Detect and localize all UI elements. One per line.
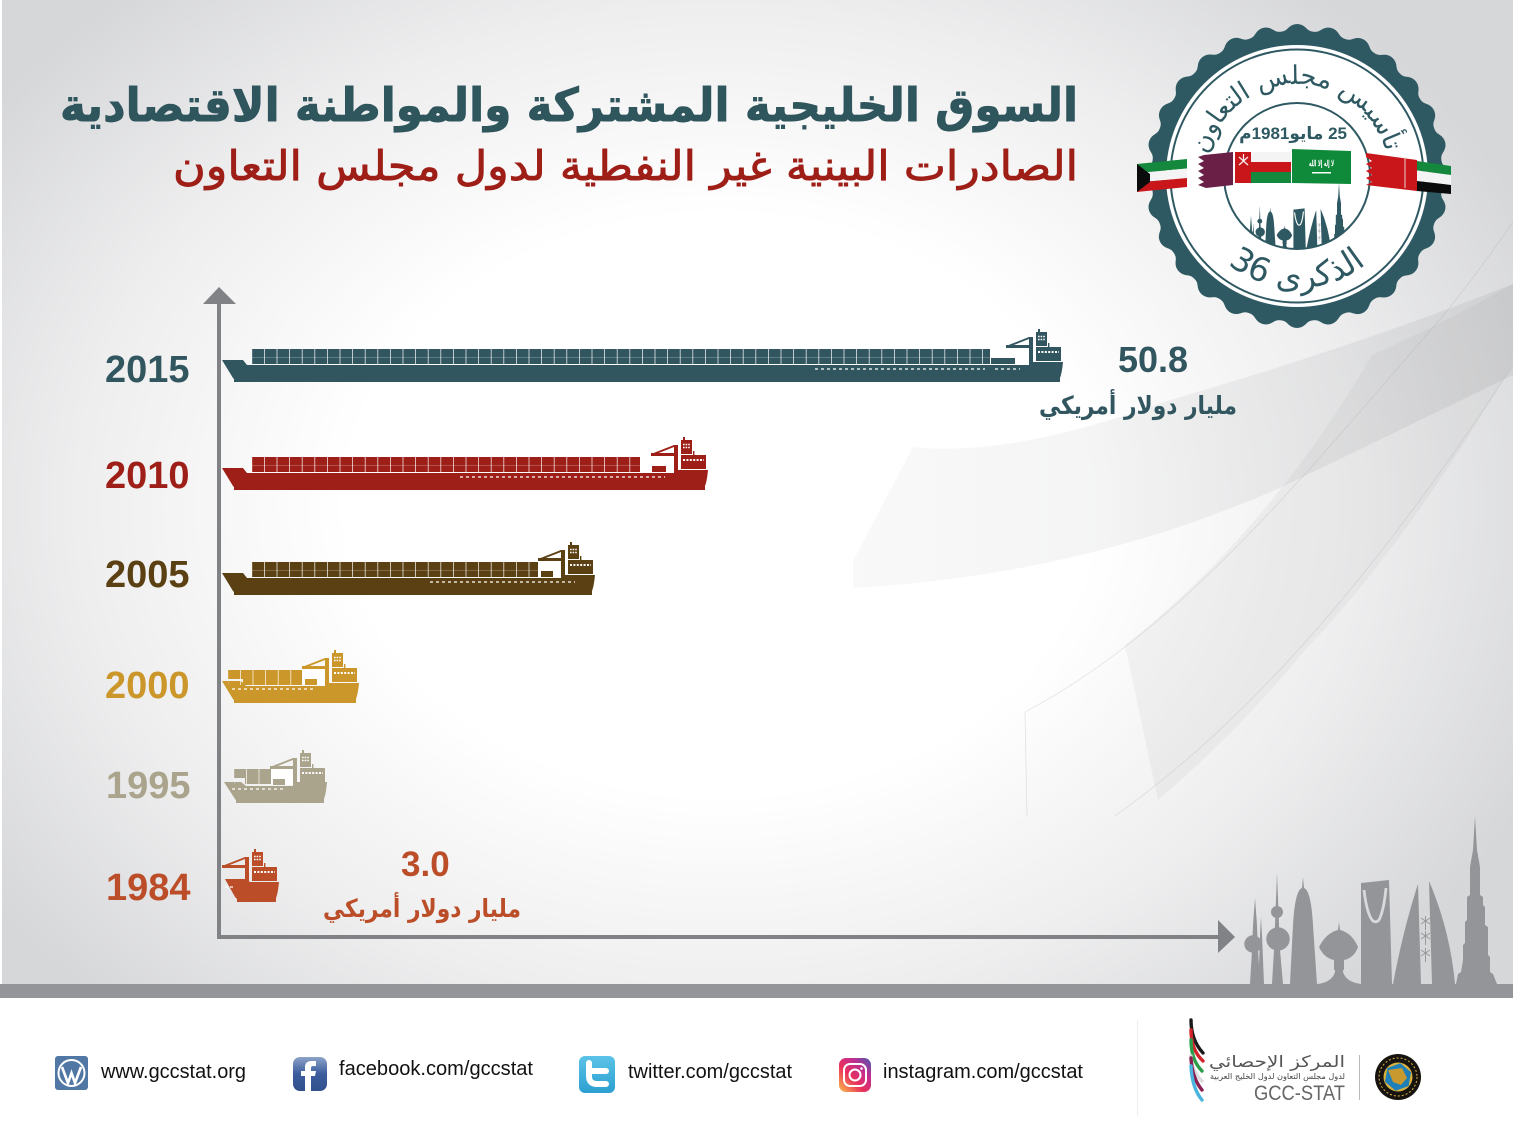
title: السوق الخليجية المشتركة والمواطنة الاقتصادية [60, 78, 1078, 132]
ship 1995 [224, 750, 327, 803]
icon: twitter [579, 1056, 615, 1093]
seal date: 25 مايو1981م [1239, 124, 1347, 144]
ship 2000 [222, 650, 359, 703]
year label 1995: 1995 [106, 765, 191, 807]
year label 1984: 1984 [106, 867, 191, 909]
anniversary seal [1137, 24, 1451, 328]
axes [203, 287, 1235, 953]
icon: instagram [839, 1058, 871, 1092]
icon: facebook [293, 1057, 327, 1091]
GCC-STAT logo [1191, 1020, 1345, 1105]
link: twitter: twitter.com/gccstat [628, 1061, 792, 1083]
flag: UAE [1417, 161, 1451, 194]
logo arabic name: المركز الإحصائي [1209, 1052, 1345, 1072]
seal anniversary text: الذكرى 36 [1230, 246, 1364, 296]
flag: Saudi Arabia: لا إله إلا الله [1309, 159, 1334, 169]
link: facebook: facebook.com/gccstat [339, 1058, 533, 1080]
ship 2015 [222, 329, 1063, 382]
flag: Saudi Arabia [1292, 149, 1351, 184]
value unit: مليار دولار أمريكي [1039, 389, 1237, 421]
link: website: www.gccstat.org [100, 1061, 246, 1083]
footer links [55, 1056, 1083, 1093]
footer vertical separator [1137, 1020, 1138, 1116]
logo ribbons [1191, 1020, 1203, 1100]
value number: 50.8 [1118, 339, 1188, 380]
flags [1137, 149, 1451, 194]
GCC emblem [1375, 1054, 1421, 1100]
footer divider bar [0, 984, 1513, 998]
logo separator [1359, 1055, 1360, 1100]
ship 1984 [222, 849, 279, 902]
value 1984 [323, 845, 521, 924]
link: instagram: instagram.com/gccstat [883, 1061, 1083, 1083]
flag: Oman [1235, 152, 1291, 183]
value number: 3.0 [401, 845, 450, 884]
flag: Bahrain [1366, 153, 1417, 191]
year label 2010: 2010 [105, 455, 190, 497]
value unit: مليار دولار أمريكي [323, 892, 521, 924]
seal curved heading: تأسيس مجلس التعاون [1198, 64, 1408, 152]
skyline [1244, 816, 1497, 984]
icon: wordpress [55, 1056, 88, 1090]
logo arabic subline: لدول مجلس التعاون لدول الخليج العربية [1210, 1072, 1345, 1081]
flag: Qatar [1198, 152, 1233, 188]
year label 2015: 2015 [105, 349, 190, 391]
flag: Kuwait [1137, 159, 1187, 192]
year label 2005: 2005 [105, 554, 190, 596]
ship 2010 [222, 437, 708, 490]
logo latin name: GCC-STAT [1254, 1082, 1345, 1105]
ship 2005 [222, 542, 595, 595]
subtitle: الصادرات البينية غير النفطية لدول مجلس التعاون [173, 142, 1078, 190]
year label 2000: 2000 [105, 665, 190, 707]
value 2015 [1039, 339, 1237, 421]
seal skyline [1250, 184, 1344, 248]
